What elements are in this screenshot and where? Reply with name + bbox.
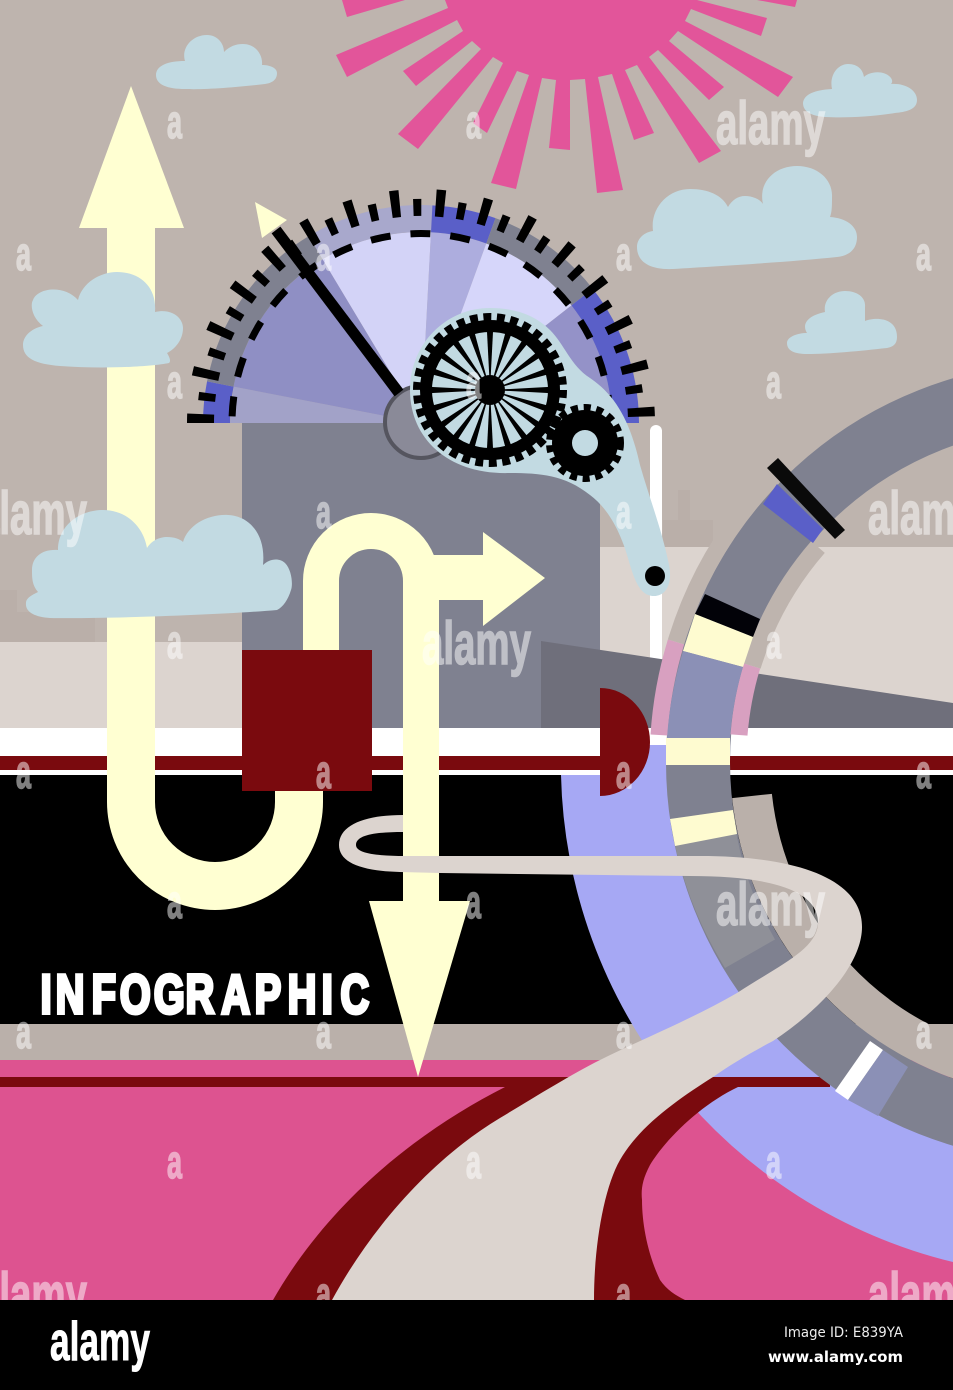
white pole	[650, 425, 662, 665]
title: INFOGRAPHIC	[41, 965, 369, 1026]
arrows	[79, 86, 545, 1077]
building block	[242, 423, 600, 728]
short ticks	[207, 207, 636, 404]
half disc	[600, 688, 650, 796]
watermarks: a	[766, 355, 781, 408]
watermarks: alamy	[422, 610, 531, 677]
watermarks: a	[167, 1135, 182, 1188]
watermarks: alamy	[716, 871, 825, 938]
watermarks: a	[16, 745, 31, 798]
blue band	[763, 484, 823, 543]
watermarks: a	[766, 615, 781, 668]
gear plate	[410, 308, 670, 596]
big gear	[418, 318, 562, 462]
winding road	[332, 815, 862, 1300]
watermarks: a	[616, 485, 631, 538]
red square	[242, 650, 372, 791]
watermarks: a	[616, 745, 631, 798]
up arrow with U-bend	[79, 86, 299, 886]
watermarks: a	[466, 95, 481, 148]
image id: Image ID: E839YA	[784, 1325, 903, 1341]
dark red curves	[273, 1077, 830, 1300]
watermarks: a	[167, 95, 182, 148]
gauge ring	[216, 219, 626, 423]
watermarks: a	[316, 1267, 331, 1320]
lower periwinkle section	[848, 1050, 908, 1116]
needle	[276, 230, 399, 393]
cream stripe	[683, 614, 753, 667]
black stripe	[695, 594, 760, 637]
watermarks: a	[16, 1005, 31, 1058]
light ground band	[0, 547, 953, 728]
watermarks: a	[616, 227, 631, 280]
watermarks: a	[616, 1267, 631, 1320]
outer sleeve	[676, 497, 755, 642]
watermarks: a	[916, 227, 931, 280]
watermarks: a	[616, 1005, 631, 1058]
clouds	[23, 35, 917, 618]
pivot dot	[645, 566, 665, 586]
watermarks: a	[167, 615, 182, 668]
footer bar	[0, 1300, 953, 1390]
watermarks: a	[316, 485, 331, 538]
watermarks: a	[316, 1005, 331, 1058]
watermarks: a	[766, 1135, 781, 1188]
watermarks: a	[916, 1005, 931, 1058]
watermarks: a	[167, 875, 182, 928]
long ticks	[200, 203, 642, 423]
lower inner sleeve	[752, 796, 953, 1073]
watermarks: a	[466, 875, 481, 928]
horizontal stripes	[0, 728, 953, 1300]
sun	[336, 0, 797, 193]
footer logo: alamy	[50, 1310, 150, 1372]
down and right arrow	[321, 531, 545, 1077]
background sky	[0, 0, 953, 728]
ring pipe	[659, 394, 953, 1130]
small gear	[550, 408, 620, 478]
watermarks: a	[466, 355, 481, 408]
watermarks: alamy	[716, 90, 825, 157]
grey wedge	[541, 641, 953, 728]
lighter grey section	[670, 810, 775, 968]
cream section	[666, 738, 730, 765]
pink sleeve sections	[659, 642, 752, 735]
white stripe	[835, 1041, 883, 1100]
lower cream stripe	[670, 810, 737, 846]
periwinkle wave	[561, 745, 953, 1262]
gauge wedges	[230, 232, 612, 423]
distant skyline	[0, 490, 713, 642]
inner dashes	[232, 234, 610, 416]
footer url: www.alamy.com	[768, 1348, 903, 1366]
watermarks: a	[466, 1135, 481, 1188]
watermarks: a	[916, 745, 931, 798]
watermarks: a	[167, 355, 182, 408]
hub	[385, 386, 457, 458]
watermarks: a	[16, 227, 31, 280]
upper inner sleeve	[752, 547, 818, 666]
watermarks: a	[316, 745, 331, 798]
black bar	[767, 458, 845, 539]
periwinkle section	[667, 651, 743, 738]
needle arrowhead	[255, 202, 287, 238]
watermarks: a	[316, 227, 331, 280]
gauge	[200, 202, 642, 458]
